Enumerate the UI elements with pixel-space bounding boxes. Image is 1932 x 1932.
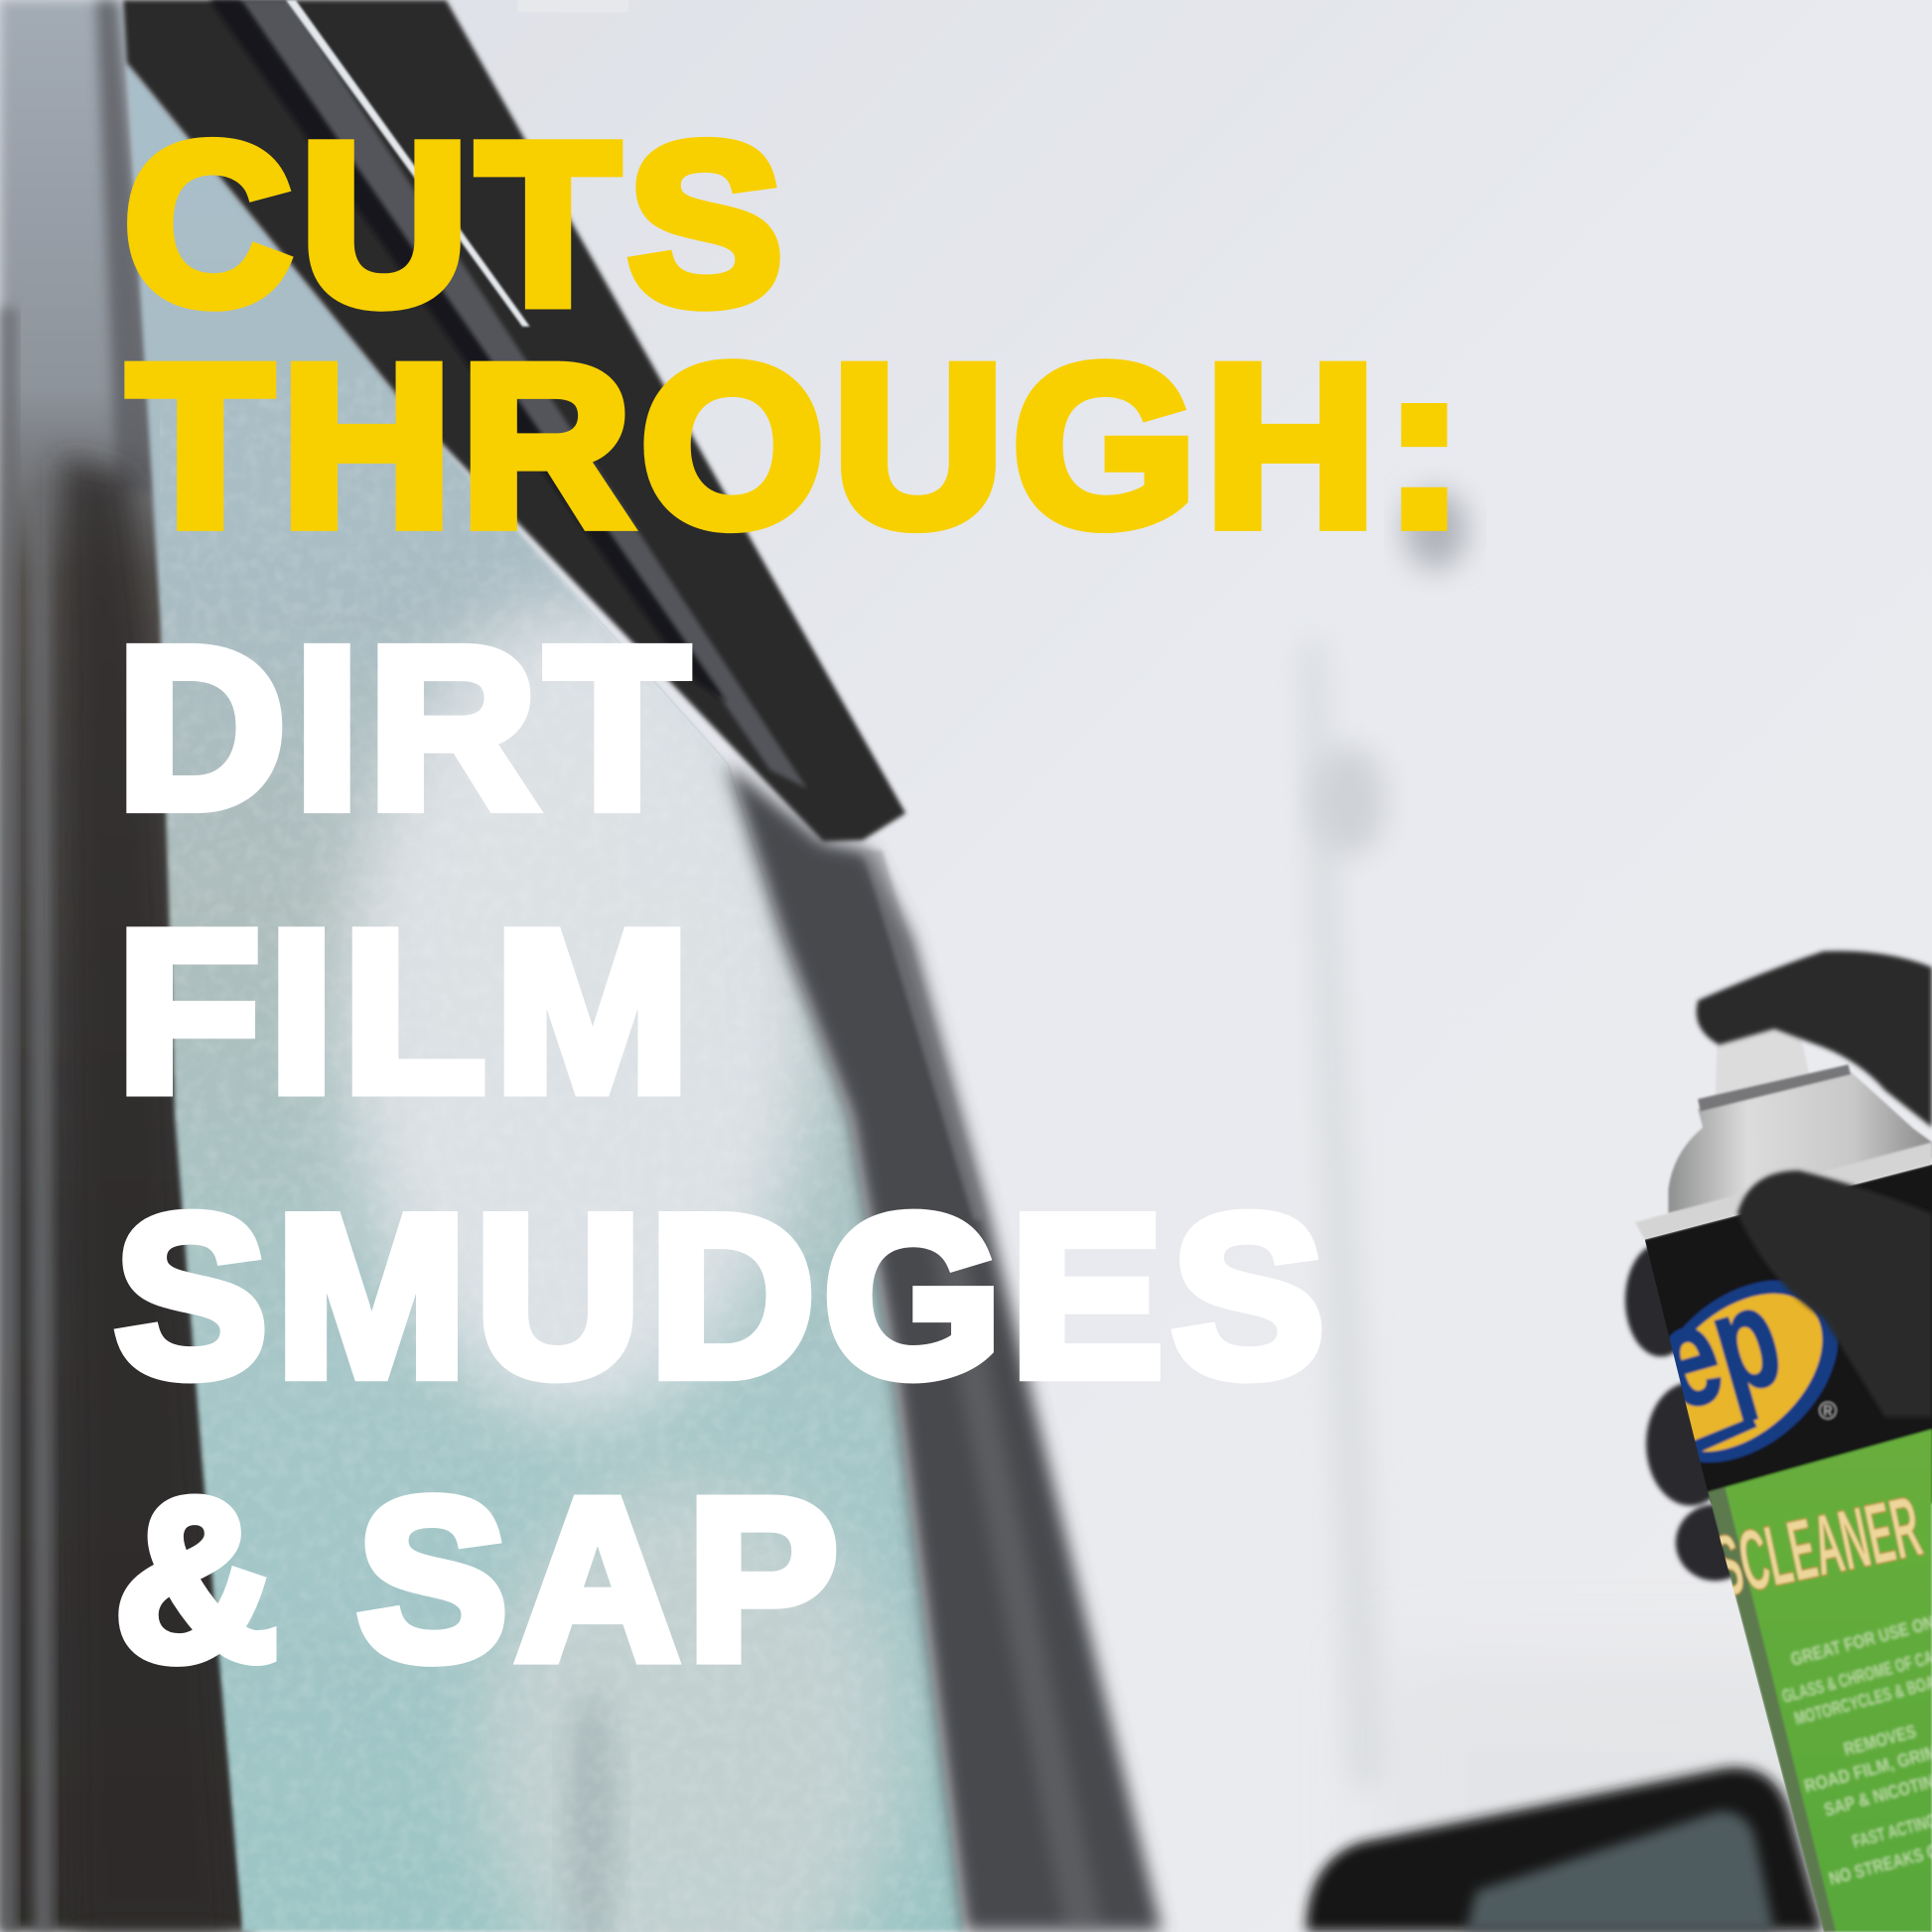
registered mark: ® [1819,1399,1837,1426]
window frame [727,763,1162,1932]
spray can and gloved hand [1613,951,1932,1932]
line: THROUGH:: THROUGH: [128,318,1472,574]
can rim [1635,1142,1932,1240]
can body and label [1644,1165,1932,1932]
zep logo: ep [1641,1256,1797,1441]
dark window rail [123,0,905,842]
line: & SAP: & SAP [114,1450,847,1707]
can dome [1668,1064,1932,1213]
label copy [1780,1611,1932,1889]
list: dirt, film, smudges and sap [114,600,1333,1707]
zep logo [1613,1244,1873,1499]
spray nozzle [1716,1018,1811,1103]
front gloved fingers [1697,951,1932,1417]
line: SMUDGES: SMUDGES [114,1168,1333,1424]
line: DIRT: DIRT [117,600,697,856]
rear gloved fingers [1625,1243,1754,1581]
line: CUTS: CUTS [124,95,791,351]
line: FILM: FILM [117,883,699,1139]
side mirror [1307,1767,1824,1932]
car door and body [0,0,252,1932]
side window glass [127,63,973,1932]
heading: cuts through [124,95,1472,574]
